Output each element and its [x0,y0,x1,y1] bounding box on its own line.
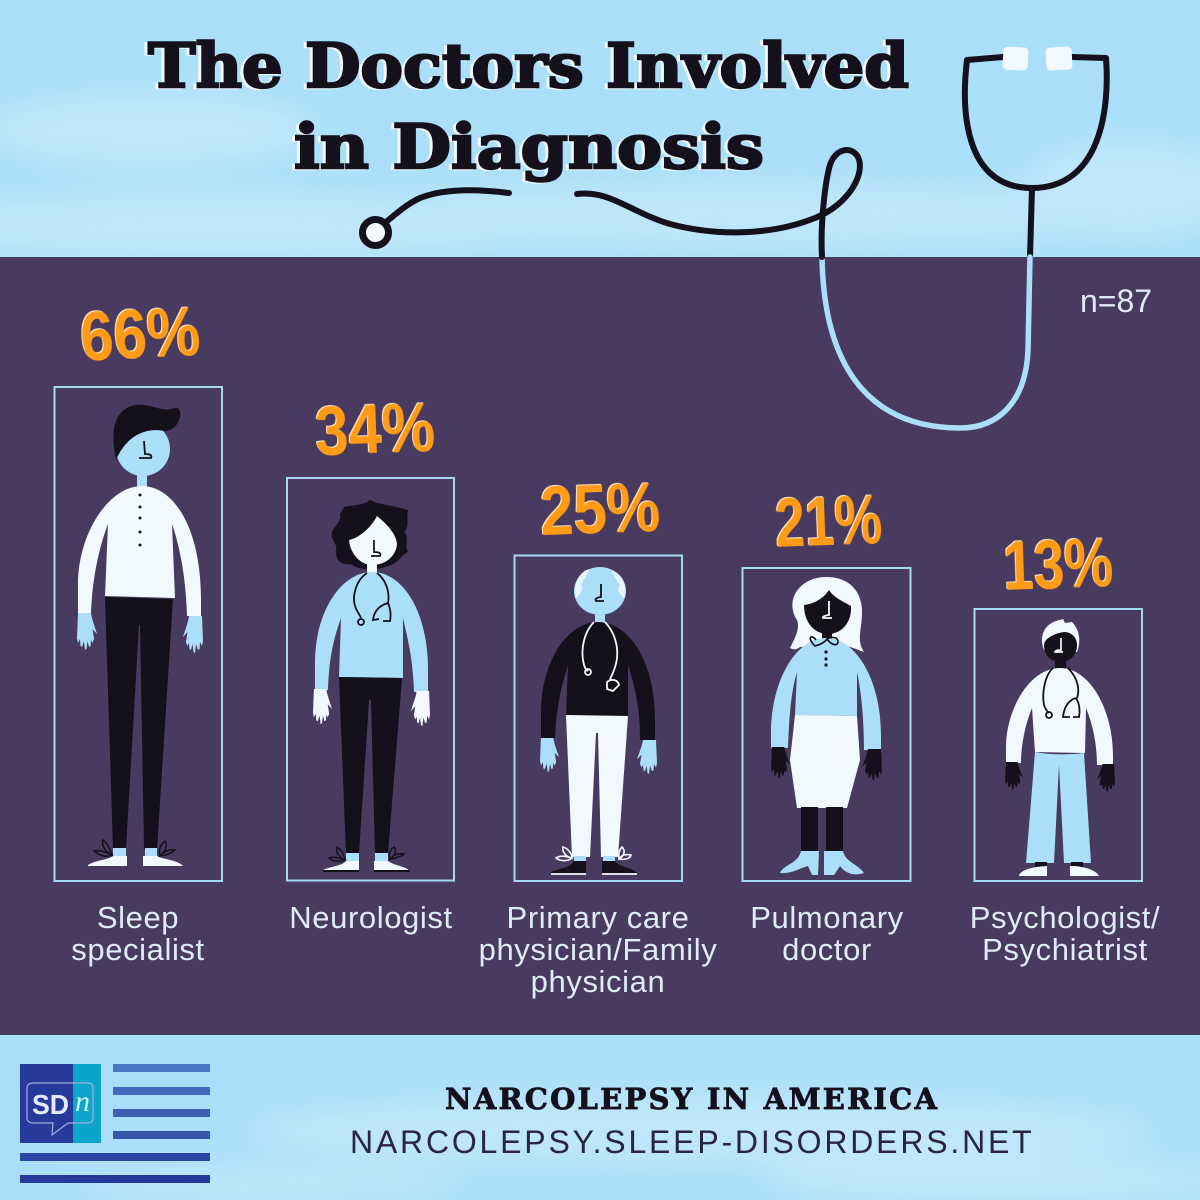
label: primary care physician: physician/Family [479,932,717,967]
label: primary care physician: physician [531,964,665,999]
figure: primary care physician [514,556,682,881]
figure: neurologist [287,478,454,880]
label: psychologist / psychiatrist [970,900,1160,967]
value: 13%: 13% [1002,523,1114,605]
value: 21%: 21% [774,480,883,562]
logo: SDn: SD [32,1089,69,1120]
value: 34%: 34% [314,388,436,470]
logo: flag stripes [20,1064,210,1183]
icon: large stethoscope [362,46,1107,428]
logo: SDn [20,1064,101,1143]
value: 66%: 66% [78,292,202,376]
value: 25%: 25% [539,468,661,550]
label: neurologist: Neurologist [289,900,453,935]
label: primary care physician [479,900,717,999]
label: pulmonary doctor: doctor [782,932,872,967]
footer website: NARCOLEPSY.SLEEP-DISORDERS.NET [350,1124,1034,1160]
label: psychologist / psychiatrist: Psychologist/ [970,900,1160,935]
label: pulmonary doctor [750,900,904,967]
label: pulmonary doctor: Pulmonary [750,900,904,935]
sample size note: n=87 [1080,283,1152,319]
panel: dark chart background [0,257,1200,1035]
title: in Diagnosis [294,112,764,183]
figure: sleep specialist [54,387,222,881]
figure: pulmonary doctor [742,568,910,881]
label: sleep specialist: specialist [71,932,205,967]
footer heading: NARCOLEPSY IN AMERICA [445,1082,937,1116]
label: primary care physician: Primary care [507,900,689,935]
label: psychologist / psychiatrist: Psychiatrist [982,932,1148,967]
title [148,31,909,183]
label: sleep specialist: Sleep [97,900,179,935]
figure: psychologist / psychiatrist [974,609,1142,881]
logo: SDn: n [75,1085,90,1118]
label: sleep specialist [71,900,205,967]
title: The Doctors Involved [148,31,909,102]
